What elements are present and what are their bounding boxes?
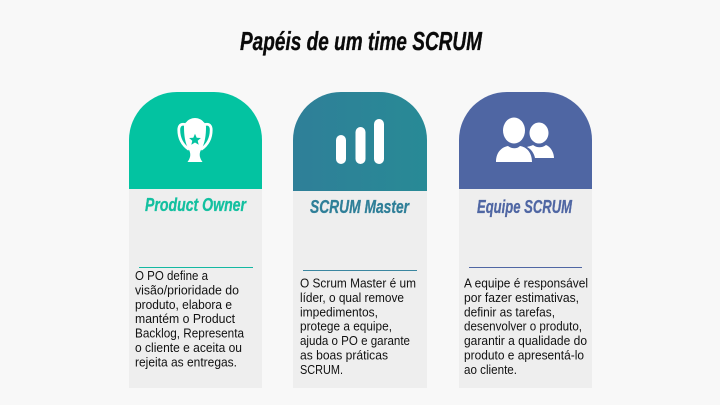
panel body: [293, 191, 427, 388]
text: SCRUM Master description: SCRUM.: [300, 363, 343, 377]
text: SCRUM Master description: líder, o qual remove: [300, 291, 404, 305]
text: Product Owner description: mantém o Product: [135, 312, 236, 326]
icon: bars: [336, 119, 384, 164]
heading: SCRUM Master: SCRUM Master: [310, 197, 410, 217]
text: Product Owner description: visão/prioridade do: [135, 283, 239, 297]
text: Equipe SCRUM description: garantir a qualidade do: [464, 334, 587, 348]
text: SCRUM Master description: as boas práticas: [300, 348, 388, 362]
text: SCRUM Master description: ajuda o PO e garante: [300, 334, 410, 348]
icon: trophy: [179, 118, 211, 162]
text: Product Owner description: rejeita as entregas.: [135, 355, 237, 369]
text: Product Owner description: Backlog, Representa: [135, 327, 244, 341]
text: Equipe SCRUM description: produto e apresentá-lo: [464, 348, 584, 362]
text: Equipe SCRUM description: definir as tarefas,: [464, 305, 555, 319]
text: Product Owner description: O PO define a: [135, 269, 208, 283]
heading: Product Owner: Product Owner: [145, 195, 247, 215]
text: SCRUM Master description: O Scrum Master é um: [300, 276, 416, 290]
text: SCRUM Master description: impedimentos,: [300, 305, 378, 319]
heading: Equipe SCRUM: Equipe SCRUM: [477, 197, 573, 217]
text: Product Owner description: o cliente e aceita ou: [135, 341, 242, 355]
text: Product Owner description: produto, elabora e: [135, 298, 232, 312]
text: Equipe SCRUM description: ao cliente.: [464, 363, 517, 377]
panel body: [129, 189, 262, 388]
text: Equipe SCRUM description: por fazer estimativas,: [464, 291, 579, 305]
icon: people: [496, 118, 554, 162]
title: Papéis de um time SCRUM: [240, 26, 483, 56]
panel: SCRUM Master: [293, 92, 427, 388]
panel header: [459, 92, 592, 189]
text: Equipe SCRUM description: desenvolver o produto,: [464, 320, 582, 334]
text: SCRUM Master description: protege a equipe,: [300, 320, 392, 334]
panel header: [129, 92, 262, 189]
text: Equipe SCRUM description: A equipe é responsável: [464, 276, 588, 290]
panel body: [459, 189, 592, 388]
panel: Equipe SCRUM: [459, 92, 592, 388]
panel: Product Owner: [129, 92, 262, 388]
